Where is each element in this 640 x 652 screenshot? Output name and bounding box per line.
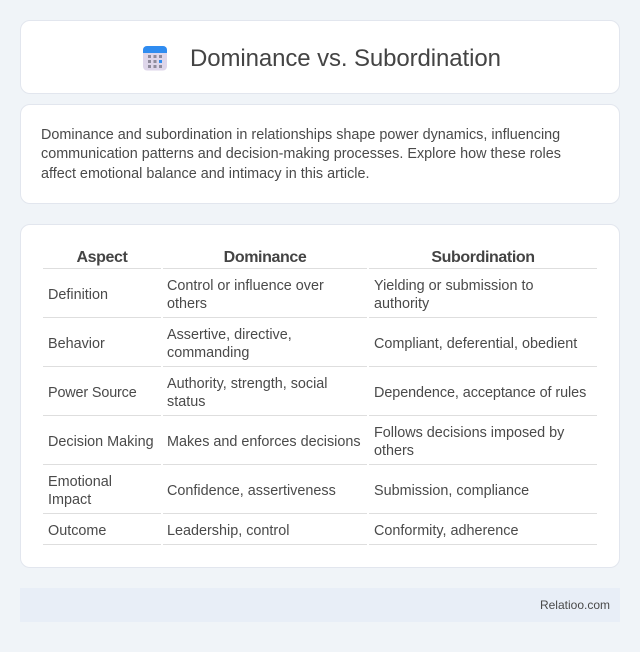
comparison table: status	[167, 394, 205, 410]
footer bar	[20, 588, 620, 622]
comparison table: Follows decisions imposed by	[374, 425, 564, 441]
header panel	[20, 20, 620, 94]
intro text: affect emotional balance and intimacy in this article.	[41, 166, 370, 182]
row: Emotional Impact	[48, 474, 112, 508]
row: Emotional Impact: Impact	[48, 492, 91, 508]
comparison table: Compliant, deferential, obedient	[374, 336, 577, 352]
column heading: Subordination: Subordination	[431, 249, 535, 266]
intro text	[41, 126, 561, 182]
comparison table: commanding	[167, 345, 249, 361]
row: Definition: Definition	[48, 287, 108, 303]
intro panel	[20, 104, 620, 204]
row: Decision Making: Decision Making	[48, 434, 154, 450]
comparison table: Leadership, control	[167, 523, 289, 539]
title: Dominance vs. Subordination	[190, 45, 501, 72]
comparison table: others	[167, 296, 207, 312]
comparison table: Submission, compliance	[374, 483, 529, 499]
column heading: Dominance: Dominance	[224, 249, 306, 266]
row: Emotional Impact: Emotional	[48, 474, 112, 490]
table panel	[20, 224, 620, 568]
comparison table: Makes and enforces decisions	[167, 434, 361, 450]
intro text: communication patterns and decision-making processes. Explore how these roles	[41, 146, 561, 162]
row: Power Source: Power Source	[48, 385, 137, 401]
comparison table: others	[374, 443, 414, 459]
footer credit: Relatioo.com	[540, 598, 610, 612]
comparison table: Assertive, directive,	[167, 327, 292, 343]
comparison table: Yielding or submission to	[374, 278, 533, 294]
row: Outcome: Outcome	[48, 523, 106, 539]
row: Behavior: Behavior	[48, 336, 105, 352]
comparison table: Confidence, assertiveness	[167, 483, 336, 499]
comparison table: Control or influence over	[167, 278, 324, 294]
intro text: Dominance and subordination in relationships shape power dynamics, influencing	[41, 126, 560, 142]
column heading: Aspect: Aspect	[77, 249, 127, 266]
icon: calendar	[143, 46, 167, 70]
comparison table: Conformity, adherence	[374, 523, 519, 539]
comparison table: Dependence, acceptance of rules	[374, 385, 586, 401]
comparison table: authority	[374, 296, 429, 312]
comparison table: Authority, strength, social	[167, 376, 328, 392]
